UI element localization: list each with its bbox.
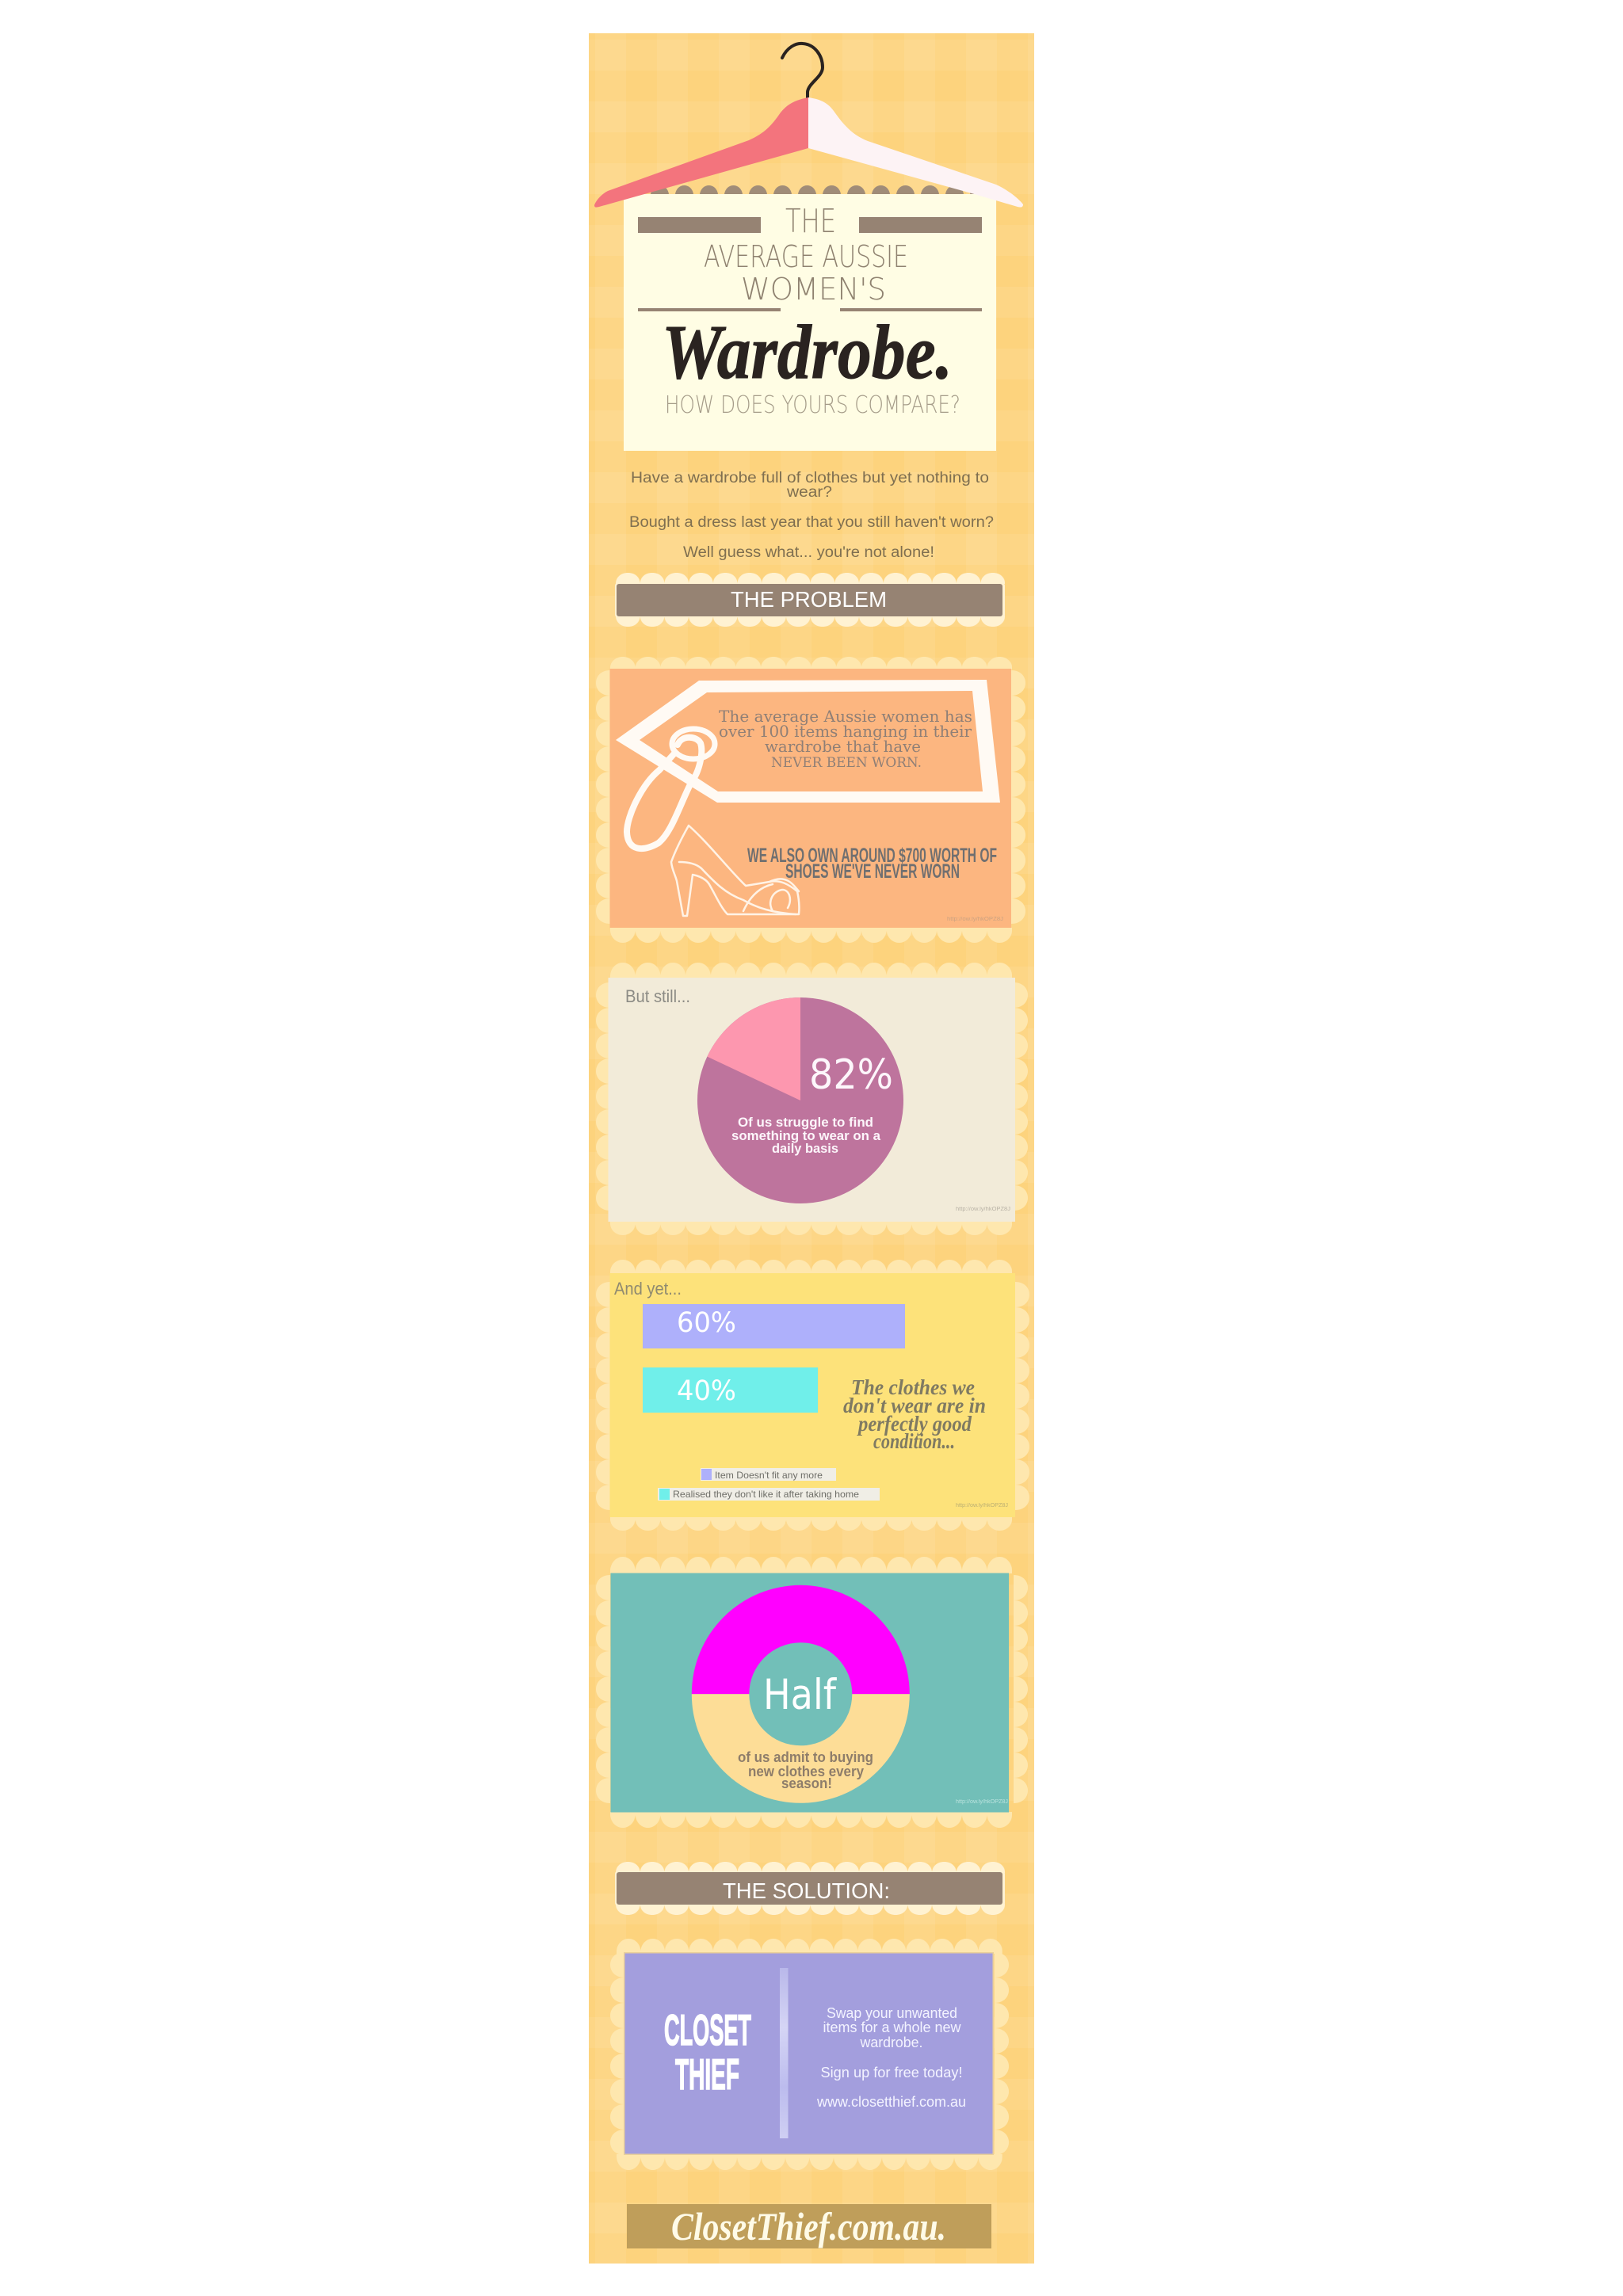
heading: the average aussie women's: WOMEN'S (741, 272, 886, 307)
donut caption: season! (781, 1775, 832, 1791)
source credit: http://ow.ly/hkOPZ8J (947, 917, 1003, 922)
script callout: perfectly good (857, 1412, 972, 1436)
pie value: 82% (809, 1051, 893, 1099)
bar: 40 percent (643, 1367, 818, 1413)
shoes text: SHOES WE'VE NEVER WORN (785, 860, 960, 883)
legend: Item Doesn't fit any more (715, 1470, 823, 1481)
panel label: But still... (625, 986, 690, 1006)
shoes text (747, 845, 997, 883)
call to action: Swap your unwanted (827, 2005, 957, 2021)
panel: closet thief (610, 1939, 1009, 2170)
banner: the problem: THE PROBLEM (731, 587, 887, 612)
tag text: wardrobe that have (765, 737, 921, 756)
bar: 60 percent: 60% (677, 1307, 736, 1339)
pie caption (731, 1115, 881, 1156)
donut caption: of us admit to buying (738, 1749, 873, 1765)
background panel (589, 33, 1034, 2264)
bar: 60 percent (643, 1304, 905, 1348)
legend: Realised they don't like it after taking home (673, 1489, 859, 1500)
heading: the average aussie women's (638, 202, 982, 311)
call to action: items for a whole new (823, 2019, 961, 2035)
panel: bar chart (596, 1260, 1029, 1531)
lace trim (647, 185, 975, 194)
donut label: Half (763, 1671, 837, 1719)
script callout: don't wear are in (843, 1394, 986, 1417)
pie caption: something to wear on a (731, 1128, 881, 1143)
icon: high heel shoe (671, 826, 799, 916)
heading: the average aussie women's: THE (785, 202, 836, 240)
shoes text: WE ALSO OWN AROUND $700 WORTH OF (747, 845, 997, 867)
script callout: condition... (873, 1429, 955, 1453)
intro text (629, 470, 994, 561)
title card (624, 185, 996, 451)
panel label: And yet... (614, 1279, 682, 1299)
tag text (719, 707, 972, 771)
icon: clothes hanger (594, 44, 1023, 208)
banner: the problem (615, 573, 1005, 627)
closet thief logo (664, 2005, 751, 2099)
tag text: NEVER BEEN WORN. (771, 755, 922, 771)
heading: the average aussie women's: AVERAGE AUSSIE (704, 239, 908, 274)
donut chart (692, 1585, 910, 1803)
source credit: http://ow.ly/hkOPZ8J (956, 1799, 1008, 1805)
footer banner: ClosetThief.com.au. (671, 2204, 946, 2248)
source credit: http://ow.ly/hkOPZ8J (956, 1207, 1010, 1212)
banner: the solution (615, 1862, 1005, 1915)
intro text: Bought a dress last year that you still haven't worn? (629, 514, 994, 531)
closet thief logo: THIEF (675, 2050, 739, 2099)
call to action: Sign up for free today! (821, 2065, 962, 2081)
pie chart (697, 997, 903, 1203)
bar: 40 percent: 40% (677, 1375, 736, 1407)
panel: 82 percent pie chart (596, 963, 1028, 1235)
panel: closet thief: CLOSET (664, 2005, 751, 2054)
call to action (816, 2005, 966, 2110)
banner: the solution: THE SOLUTION: (723, 1878, 890, 1903)
intro text: wear? (786, 484, 832, 501)
pie caption: Of us struggle to find (738, 1115, 873, 1130)
panel: unworn items (596, 657, 1025, 943)
tag text: over 100 items hanging in their (719, 722, 972, 741)
source credit: http://ow.ly/hkOPZ8J (956, 1503, 1008, 1508)
panel: half donut chart (596, 1557, 1028, 1828)
subtitle: HOW DOES YOURS COMPARE? (665, 391, 960, 419)
heading: wardrobe: Wardrobe. (662, 310, 953, 395)
donut caption: new clothes every (748, 1764, 864, 1779)
call to action: wardrobe. (860, 2035, 922, 2050)
icon: price tag (616, 680, 1000, 849)
legend (658, 1468, 880, 1501)
pie caption: daily basis (772, 1141, 838, 1156)
tag text: The average Aussie women has (719, 707, 972, 726)
intro text: Have a wardrobe full of clothes but yet nothing to (631, 470, 989, 486)
script callout: The clothes we (851, 1375, 975, 1399)
call to action: www.closetthief.com.au (816, 2094, 966, 2110)
script callout (843, 1375, 986, 1453)
intro text: Well guess what... you're not alone! (683, 544, 934, 561)
donut caption (738, 1749, 873, 1791)
